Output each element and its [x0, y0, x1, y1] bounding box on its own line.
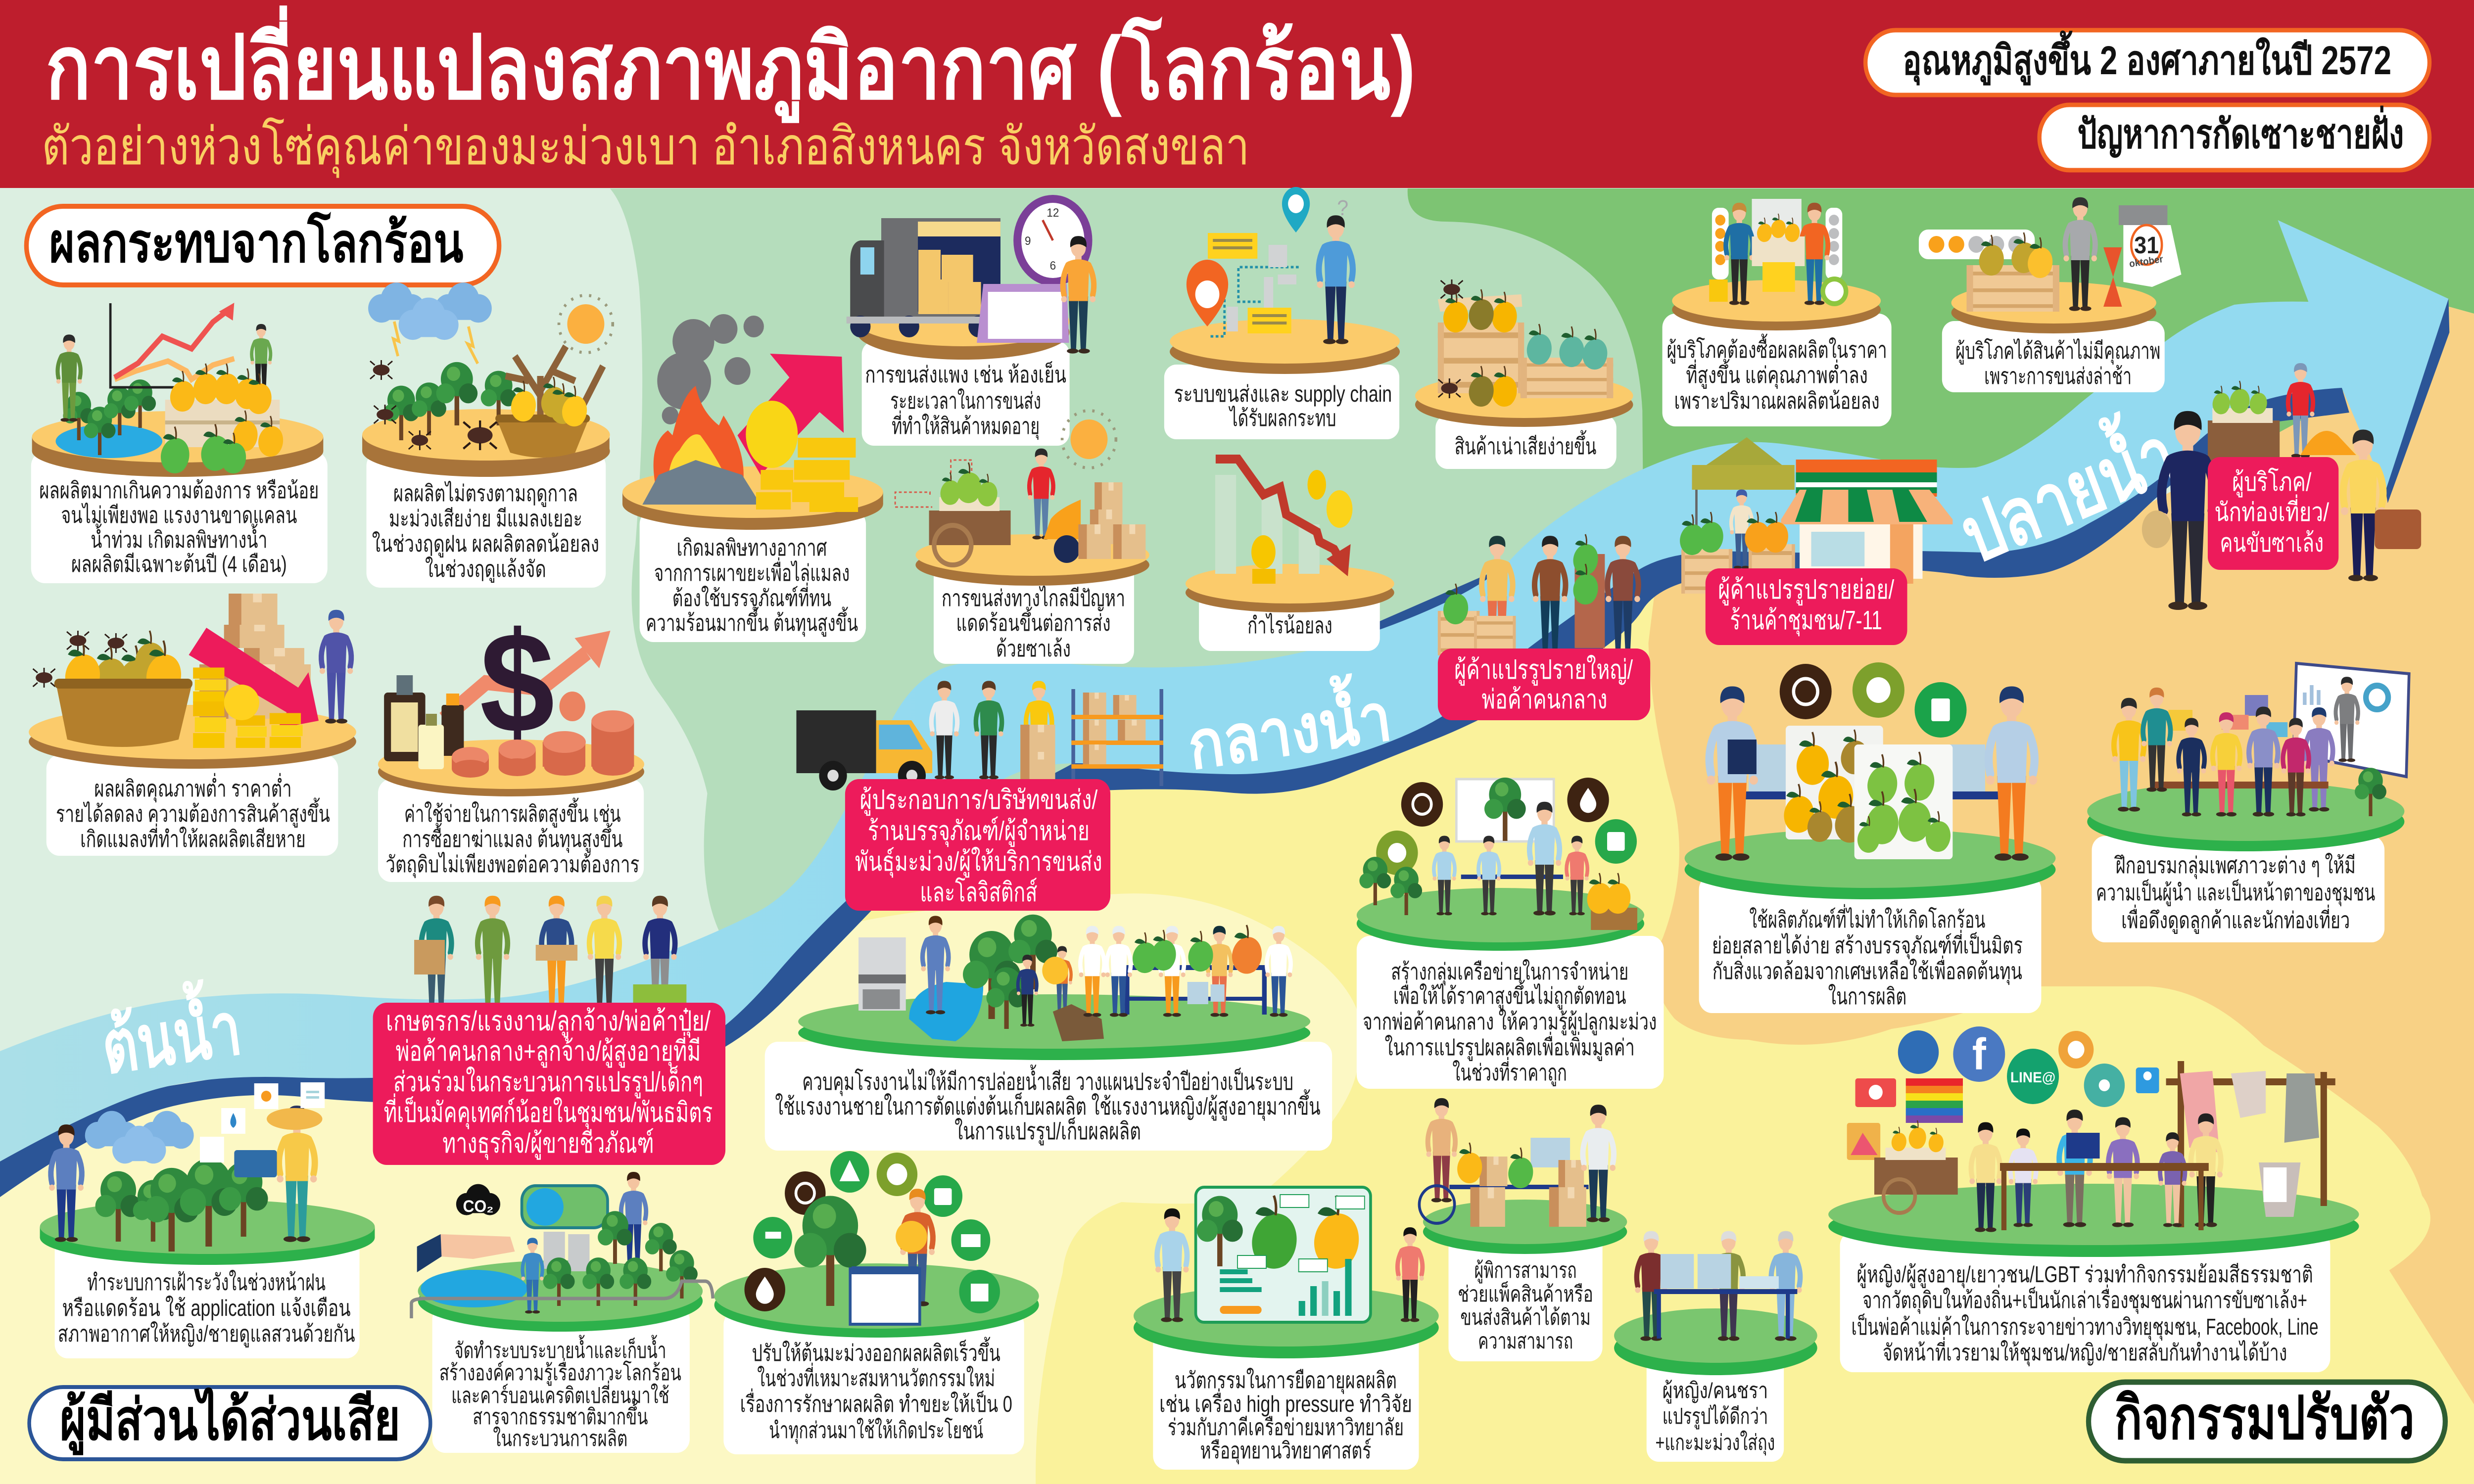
illustration: social media, LGBT flag, dyeing: [1847, 1026, 2335, 1232]
panel: weather monitoring: [40, 1082, 375, 1358]
platform: [378, 740, 644, 796]
illustration: elders at packing table: [1635, 1231, 1802, 1341]
panel: retailers group (wholesale): [1438, 534, 1650, 720]
text card: ขนส่งสินค้าได้ตาม: [1460, 1305, 1591, 1330]
text card: หรือแดดร้อน ใช้ application แจ้งเตือน: [62, 1295, 351, 1321]
text card: [1448, 1232, 1603, 1361]
text card: ค่าใช้จ่ายในการผลิตสูงขึ้น เช่น: [404, 797, 621, 828]
panel: logistics operators: [796, 681, 1163, 911]
text card: สภาพอากาศให้หญิง/ชายดูแลสวนด้วยกัน: [58, 1321, 355, 1347]
panel: network sales: [1357, 778, 1664, 1089]
river arrow light body: [0, 220, 2448, 1161]
text card: นำทุกส่วนมาใช้ให้เกิดประโยชน์: [769, 1417, 983, 1444]
platform: [40, 1200, 375, 1265]
text card: [31, 451, 328, 583]
illustration: low rating, crate, calendar: oktober: [2129, 253, 2164, 270]
heading: impacts: ผลกระทบจากโลกร้อน: [49, 212, 463, 274]
illustration: cold truck, clock, calendar: 3: [1075, 234, 1082, 247]
header band: [0, 0, 2474, 188]
illustration: basket, falling price arrow: [33, 594, 353, 748]
text card: การขนส่งแพง เช่น ห้องเย็น: [865, 361, 1066, 387]
label: retailers: ผู้ค้าแปรรูปรายย่อย/: [1718, 575, 1895, 605]
panel: off-season fruiting: [714, 1151, 1039, 1454]
river label: upstream: ต้นน้ำ: [95, 974, 246, 1089]
text card: ฝึกอบรมกลุ่มเพศภาวะต่าง ๆ ให้มี: [2114, 852, 2356, 879]
text card: เกิดแมลงที่ทำให้ผลผลิตเสียหาย: [80, 824, 306, 852]
river label: downstream: ปลายน้ำ: [1945, 396, 2188, 580]
platform: [1951, 282, 2156, 333]
panel: consumers: [2142, 363, 2421, 610]
text card: [765, 1042, 1332, 1151]
illustration: low rating, crate, calendar: 31: [2134, 232, 2159, 258]
text card: [432, 1306, 690, 1453]
text card: [1699, 876, 2041, 1013]
heading: adaptation: กิจกรรมปรับตัว: [2115, 1385, 2415, 1451]
text card: ในการแปรรูปผลผลิตเพื่อเพิ่มมูลค่า: [1385, 1032, 1635, 1061]
panel: spoilage: [1415, 279, 1633, 469]
label: retailers: ร้านค้าชุมชน/7-11: [1730, 606, 1882, 636]
text card: ระยะเวลาในการขนส่ง: [890, 388, 1041, 414]
text card: สร้างองค์ความรู้เรื่องภาวะโลกร้อน: [439, 1358, 681, 1386]
illustration: meeting with eco icons: [1359, 778, 1637, 930]
text card: ในการผลิต: [1828, 983, 1906, 1009]
illustration: cold truck, clock, calendar: [847, 195, 1095, 354]
label: wholesale traders: พ่อค้าคนกลาง: [1481, 685, 1608, 714]
pill: coastal erosion: [2040, 105, 2429, 170]
text card: [367, 451, 606, 588]
label: operators: [845, 779, 1110, 911]
panel: long-distance delivery: [895, 411, 1149, 664]
title: การเปลี่ยนแปลงสภาพภูมิอากาศ (โลกร้อน): [46, 5, 1416, 124]
platform: [1357, 888, 1644, 951]
label: consumers: [2208, 457, 2338, 570]
text card: แปรรูปได้ดีกว่า: [1663, 1404, 1768, 1430]
illustration: tourists and motor cart: [2142, 363, 2421, 610]
text card: กำไรน้อยลง: [1247, 612, 1332, 638]
label: consumers: นักท่องเที่ยว/: [2215, 494, 2329, 526]
text card: ผลผลิตมีเฉพาะต้นปี (4 เดือน): [71, 552, 287, 577]
platform: [857, 297, 1070, 360]
label: consumers: ผู้บริโภค/: [2232, 467, 2311, 497]
text card: การซื้อยาฆ่าแมลง ต้นทุนสูงขึ้น: [402, 822, 622, 853]
platform: [1672, 280, 1881, 330]
text card: ผลผลิตมากเกินความต้องการ หรือน้อย: [39, 478, 319, 503]
platform: [32, 411, 323, 477]
text card: จัดหน้าที่เวรยามให้ชุมชน/หญิง/ชายสลับกันทำงานได้บ้าง: [1883, 1337, 2287, 1366]
text card: [2092, 836, 2384, 942]
text card: ในช่วงที่เหมาะสมหานวัตกรรมใหม่: [757, 1363, 995, 1391]
panel: overproduction: [31, 303, 328, 583]
text card: ต้องใช้บรรจุภัณฑ์ที่ทน: [672, 583, 831, 612]
illustration: dollar sign, chemicals, coins: [384, 603, 634, 778]
text card: ร่วมกับภาคีเครือข่ายมหาวิทยาลัย: [1168, 1415, 1404, 1440]
text card: จากวัตถุดิบในท้องถิ่น+เป็นนักเล่าเรื่องชุมชนผ่านการขับซาเล้ง+: [1862, 1285, 2307, 1314]
text card: การขนส่งทางไกลมีปัญหา: [942, 585, 1125, 611]
text card: [1840, 1232, 2330, 1372]
panel: retailers group (small): [1680, 437, 1952, 645]
illustration: low rating, crate, calendar: [1919, 197, 2182, 312]
illustration: dollar sign, chemicals, coins: $: [480, 603, 555, 763]
illustration: rising chart, trees, mangoes: [55, 303, 283, 473]
label: retailers: [1706, 568, 1907, 645]
text card: ความสามารถ: [1478, 1329, 1573, 1353]
illustration: social media, LGBT flag, dyeing: LINE@: [2010, 1069, 2055, 1086]
text card: กับสิ่งแวดล้อมจากเศษเหลือใช้เพื่อลดต้นทุน: [1713, 956, 2022, 985]
text card: ที่สูงขึ้น แต่คุณภาพต่ำลง: [1686, 358, 1868, 389]
text card: ย่อยสลายได้ง่าย สร้างบรรจุภัณฑ์ที่เป็นมิตร: [1712, 930, 2023, 959]
heading: stakeholders: ผู้มีส่วนได้ส่วนเสีย: [60, 1388, 400, 1455]
illustration: crates with rotten mangoes: [1438, 279, 1613, 407]
platform: [1423, 1200, 1627, 1254]
text card: ในช่วงฤดูฝน ผลผลิตลดน้อยลง: [372, 531, 599, 557]
illustration: tent and convenience store: [1680, 437, 1952, 594]
illustration: social media, LGBT flag, dyeing: f: [1972, 1030, 1987, 1079]
text card: [1663, 314, 1892, 426]
illustration: packing with wheelchair user: [1419, 1098, 1616, 1227]
panel: higher input cost: [378, 603, 644, 882]
illustration: route map and pins: [1187, 187, 1355, 344]
text card: สินค้าเน่าเสียง่ายขึ้น: [1455, 429, 1596, 459]
river arrow dark edge: [0, 299, 2449, 1197]
illustration: wholesale traders: [1438, 534, 1640, 655]
text card: ปรับให้ต้นมะม่วงออกผลผลิตเร็วขึ้น: [752, 1336, 1000, 1366]
text card: ผู้พิการสามารถ: [1474, 1258, 1577, 1284]
illustration: CO2, pond and irrigated trees: [411, 1172, 713, 1318]
label: farmers and workers: ส่วนร่วมในกระบวนการแปรรูป/เด็กๆ: [393, 1065, 703, 1098]
platform: [1186, 564, 1394, 612]
platform: [1614, 1308, 1817, 1375]
label: wholesale traders: ผู้ค้าแปรรูปรายใหญ่/: [1454, 655, 1633, 686]
illustration: buyers, crate and ratings: [1709, 199, 1848, 306]
text card: +แกะมะม่วงใส่ถุง: [1656, 1430, 1775, 1456]
text card: และคาร์บอนเครดิตเปลี่ยนมาใช้: [451, 1381, 669, 1408]
text card: [1942, 321, 2165, 392]
text card: เช่น เครื่อง high pressure ทำวิจัย: [1159, 1389, 1412, 1417]
text card: [640, 510, 866, 642]
panel: innovation: [1134, 1187, 1439, 1470]
text card: ระบบขนส่งและ supply chain: [1174, 382, 1392, 407]
text card: รายได้ลดลง ความต้องการสินค้าสูงขึ้น: [56, 797, 330, 828]
illustration: tree, calendar and eco icons: [744, 1151, 1000, 1324]
text card: ผลผลิตไม่ตรงตามฤดูกาล: [393, 480, 578, 507]
illustration: training room: [2112, 663, 2409, 817]
text card: ผู้บริโภคได้สินค้าไม่มีคุณภาพ: [1955, 338, 2160, 365]
text card: น้ำท่วม เกิดมลพิษทางน้ำ: [91, 523, 267, 553]
panel: elders packing: [1614, 1231, 1817, 1462]
panel: supply chain affected: [1164, 187, 1400, 439]
text card: นวัตกรรมในการยืดอายุผลผลิต: [1175, 1367, 1397, 1394]
subtitle: ตัวอย่างห่วงโซ่คุณค่าของมะม่วงเบา อำเภอสิงหนคร จังหวัดสงขลา: [42, 117, 1249, 178]
text card: ผู้หญิง/คนชรา: [1663, 1379, 1768, 1404]
text card: ใช้แรงงานชายในการตัดแต่งต้นเก็บผลผลิต ใช้แรงงานหญิง/ผู้สูงอายุมากขึ้น: [775, 1089, 1321, 1121]
text card: ทำระบบการเฝ้าระวังในช่วงหน้าฝน: [87, 1269, 326, 1295]
text card: [723, 1311, 1024, 1454]
text card: เรื่องการรักษาผลผลิต ทำขยะให้เป็น 0: [740, 1389, 1012, 1417]
platform: [2087, 782, 2404, 851]
illustration: storm, sun, pests, basket: [368, 282, 613, 458]
text card: [55, 1237, 359, 1358]
illustration: cold truck, clock, calendar: 6: [1050, 259, 1056, 272]
text card: ในกระบวนการผลิต: [493, 1426, 627, 1451]
platform: [714, 1263, 1039, 1338]
illustration: burning waste, rising cost: [642, 314, 858, 512]
text card: เพราะการขนส่งล่าช้า: [1984, 364, 2132, 389]
text card: เป็นพ่อค้าแม่ค้าในการกระจายข่าวทางวิทยุชุมชน, Facebook, Line: [1852, 1313, 2319, 1341]
text card: เพราะปริมาณผลผลิตน้อยลง: [1674, 389, 1880, 414]
label: operators: และโลจิสติกส์: [920, 877, 1037, 907]
label: farmers and workers: ทางธุรกิจ/ผู้ขายชีวภัณฑ์: [442, 1127, 654, 1160]
text card: [1357, 936, 1664, 1089]
platform: [362, 409, 610, 477]
text card: ด้วยซาเล้ง: [996, 637, 1071, 661]
panel: factory wastewater control: [765, 915, 1332, 1151]
platform: [1170, 319, 1400, 374]
illustration: farmers with tablet and storm: [49, 1082, 325, 1252]
platform: [1828, 1184, 2359, 1257]
label: operators: พันธุ์มะม่วง/ผู้ให้บริการขนส่ง: [855, 847, 1102, 878]
platform: [1415, 373, 1633, 427]
text card: ความเป็นผู้นำ และเป็นหน้าตาของชุมชน: [2096, 879, 2375, 906]
text card: ควบคุมโรงงานไม่ให้มีการปล่อยน้ำเสีย วางแผนประจำปีอย่างเป็นระบบ: [802, 1064, 1293, 1096]
text card: ในช่วงฤดูแล้งจัด: [425, 556, 546, 583]
text card: [378, 779, 644, 882]
panel: off-season yield: [362, 282, 613, 588]
illustration: route map and pins: ?: [1337, 196, 1348, 220]
text card: สร้างกลุ่มเครือข่ายในการจำหน่าย: [1391, 959, 1628, 985]
illustration: research screen: [1155, 1187, 1424, 1322]
text card: สารจากธรรมชาติมากขึ้น: [473, 1401, 648, 1429]
platform: [418, 1260, 703, 1332]
text card: เกิดมลพิษทางอากาศ: [677, 536, 827, 560]
panel: air pollution: [622, 314, 883, 642]
panel: people with disabilities: [1419, 1098, 1627, 1361]
text card: ได้รับผลกระทบ: [1229, 405, 1336, 431]
text card: จนไม่เพียงพอ แรงงานขาดแคลน: [61, 502, 297, 528]
platform: [915, 534, 1149, 586]
text card: วัตถุดิบไม่เพียงพอต่อความต้องการ: [385, 851, 639, 878]
label: farmers and workers: เกษตรกร/แรงงาน/ลูกจ้าง/พ่อค้าปุ๋ย/: [386, 1005, 711, 1038]
text card: ความร้อนมากขึ้น ต้นทุนสูงขึ้น: [646, 606, 858, 637]
text card: มะม่วงเสียง่าย มีแมลงเยอะ: [389, 507, 582, 531]
text card: ที่ทำให้สินค้าหมดอายุ: [892, 411, 1040, 440]
text card: [1435, 415, 1617, 469]
text card: [1164, 365, 1399, 439]
illustration: falling arrow and coins: [1215, 459, 1352, 584]
text card: ในการแปรรูป/เก็บผลผลิต: [954, 1117, 1141, 1146]
platform: [798, 994, 1310, 1060]
label: wholesale traders: [1438, 649, 1650, 720]
panel: community activities: [1828, 1026, 2359, 1372]
label: farmers and workers: พ่อค้าคนกลาง+ลูกจ้าง/ผู้สูงอายุที่มี: [396, 1032, 701, 1068]
illustration: five farmers: [414, 896, 686, 1010]
panel: farmers: [373, 896, 725, 1165]
panel: costly logistics: [847, 195, 1095, 446]
text card: [934, 559, 1134, 664]
river label: midstream: กลางน้ำ: [1182, 668, 1395, 784]
label: farmers and workers: ที่เป็นมัคคุเทศก์น้อยในชุมชน/พันธมิตร: [384, 1093, 713, 1129]
text card: [1153, 1331, 1419, 1470]
label: consumers: คนขับซาเล้ง: [2220, 528, 2324, 557]
text card: ผู้บริโภคต้องซื้อผลผลิตในราคา: [1666, 333, 1887, 364]
panel: drainage and water storage: [411, 1172, 713, 1453]
text card: จากการเผาขยะเพื่อไล่แมลง: [654, 557, 850, 586]
text card: ในช่วงที่ราคาถูก: [1452, 1057, 1567, 1086]
text card: ใช้ผลิตภัณฑ์ที่ไม่ทำให้เกิดโลกร้อน: [1749, 904, 1985, 932]
label: operators: ผู้ประกอบการ/บริษัทขนส่ง/: [859, 786, 1098, 816]
text card: ช่วยแพ็คสินค้าหรือ: [1458, 1282, 1593, 1306]
illustration: scientists and packaged mangoes: [1707, 662, 2037, 861]
text card: จัดทำระบบระบายน้ำและเก็บน้ำ: [454, 1335, 666, 1363]
text card: [1199, 591, 1380, 651]
text card: แดดร้อนขึ้นต่อการส่ง: [956, 606, 1111, 636]
illustration: CO2, pond and irrigated trees: CO₂: [463, 1197, 493, 1215]
illustration: cold truck, clock, calendar: 12: [1047, 206, 1059, 219]
text card: ผลผลิตคุณภาพต่ำ ราคาต่ำ: [94, 773, 292, 802]
panel: consumers pay more: [1663, 199, 1892, 426]
text card: หรืออุทยานวิทยาศาสตร์: [1200, 1438, 1371, 1464]
panel: eco packaging: [1685, 662, 2055, 1013]
platform: [622, 466, 883, 530]
panel: lower profit: [1186, 459, 1394, 651]
text card: [1647, 1355, 1784, 1462]
text card: เพื่อดึงดูดลูกค้าและนักท่องเที่ยว: [2121, 905, 2350, 934]
text card: เพื่อให้ได้ราคาสูงขึ้นไม่ถูกตัดทอน: [1393, 979, 1626, 1010]
panel: poor quality delivered: [1919, 197, 2182, 392]
illustration: rider with cart under sun: [895, 411, 1145, 565]
text card: ผู้หญิง/ผู้สูงอายุ/เยาวชน/LGBT ร่วมทำกิจกรรมย้อมสีธรรมชาติ: [1856, 1262, 2313, 1288]
text card: จากพ่อค้าคนกลาง ให้ความรู้ผู้ปลูกมะม่วง: [1363, 1009, 1657, 1035]
illustration: truck, workers, shelves: [796, 681, 1163, 790]
platform: [1685, 829, 2055, 899]
label: farmers and workers: [373, 1003, 725, 1165]
platform: [1134, 1285, 1439, 1358]
illustration: cold truck, clock, calendar: 9: [1025, 234, 1031, 247]
text card: [862, 341, 1070, 446]
illustration: factory, pond, team sorting mangoes: [858, 915, 1292, 1041]
platform: [29, 705, 356, 769]
pill: temperature: อุณหภูมิสูงขึ้น 2 องศาภายในปี 2572: [1903, 30, 2391, 86]
pill: coastal erosion: ปัญหาการกัดเซาะชายฝั่ง: [2078, 105, 2404, 158]
panel: gender training: [2087, 663, 2409, 942]
label: operators: ร้านบรรจุภัณฑ์/ผู้จำหน่าย: [868, 817, 1090, 847]
panel: low quality price: [29, 594, 356, 856]
text card: [47, 755, 338, 856]
pill: temperature: [1865, 30, 2429, 95]
